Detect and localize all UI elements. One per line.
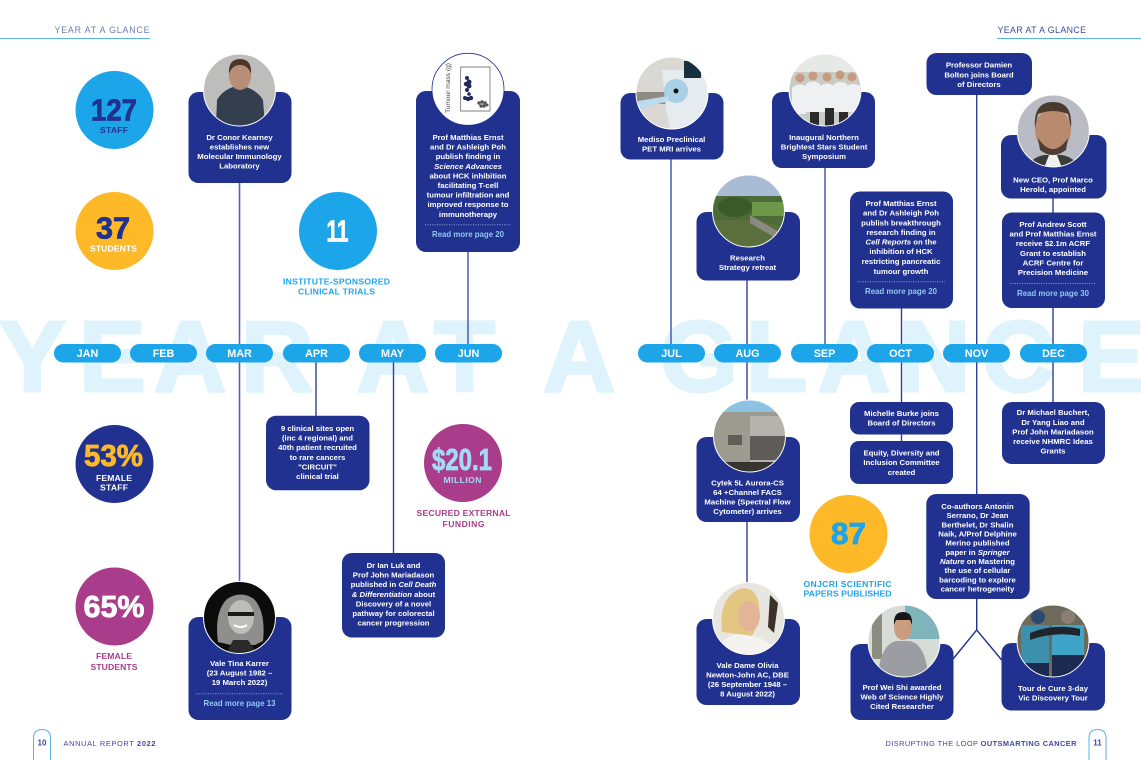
card: Cell Reports finding: research finding in (866, 228, 936, 237)
text: Cited Researcher (870, 702, 934, 711)
photo: Olivia Newton-John (712, 582, 785, 656)
month pills: JUN (458, 348, 479, 360)
card: Olivia Newton-John (696, 582, 800, 705)
card: ACRF Grant: ACRF Centre for (1023, 258, 1083, 267)
card: Ian Luk: published in Cell Death (351, 580, 436, 589)
card: Cell Reports finding: Prof Matthias Ernst (865, 199, 937, 208)
text: Web of Science Highly (861, 692, 944, 702)
card: ACRF Grant: and Prof Matthias Ernst (1010, 230, 1097, 239)
card: clinical sites: (inc 4 regional) and (282, 434, 353, 443)
card: Research Strategy retreat (696, 175, 800, 280)
card: Equity committee: Inclusion Committee (863, 458, 940, 467)
stat: 65% female students: STUDENTS (90, 662, 138, 672)
text: PET MRI arrives (642, 144, 701, 154)
text: Research (730, 254, 765, 262)
stat: 11 clinical trials: 11 (326, 214, 348, 249)
card: clinical sites: "CIRCUIT" (298, 462, 337, 471)
text: tumour infiltration and (427, 191, 510, 200)
text: 19 March 2022) (212, 678, 268, 687)
text: Laboratory (219, 162, 260, 170)
photo: Conor Kearney (203, 54, 276, 126)
footer right (886, 730, 1106, 760)
text: improved response to (428, 200, 509, 209)
footer right: 11 (1093, 738, 1102, 748)
text: publish finding in (436, 152, 501, 161)
stat: 11 clinical trials (283, 192, 390, 296)
card: Damien Bolton: Bolton joins Board (944, 70, 1014, 79)
card: Michelle Burke: Board of Directors (867, 418, 936, 428)
photo: Tina Karrer (203, 581, 276, 654)
card: clinical sites: 9 clinical sites open (281, 424, 354, 433)
text: Herold, appointed (1020, 185, 1086, 194)
read more link: Read more page 30 (1017, 289, 1090, 298)
card: clinical sites: 40th patient recruited (278, 443, 357, 452)
header left: YEAR AT A GLANCE (54, 25, 150, 35)
stat: 87 papers: 87 (831, 516, 866, 551)
card: Cell Reports finding: Cell Reports on the (865, 238, 937, 247)
footer right: DISRUPTING THE LOOP OUTSMARTING CANCER (886, 739, 1077, 748)
text: Cytek 5L Aurora-CS (711, 478, 784, 488)
month pills: DEC (1042, 348, 1065, 360)
card: Ian Luk (342, 553, 445, 638)
card: Springer Nature paper: Berthelet, Dr Shalin (942, 520, 1014, 529)
card: Cytek Aurora (696, 400, 800, 522)
card: Springer Nature paper: Serrano, Dr Jean (946, 511, 1009, 520)
card: Michelle Burke: Michelle Burke joins (864, 409, 939, 418)
card: Damien Bolton: of Directors (957, 80, 1001, 89)
text: about HCK inhibition (429, 171, 507, 180)
stat: 53% female staff: FEMALE (96, 473, 132, 483)
card: Science Advances finding (416, 53, 520, 252)
month pills: MAR (227, 348, 252, 360)
stat: 127 staff (76, 71, 154, 149)
stat: 127 staff: 127 (91, 93, 137, 128)
card: Springer Nature paper: the use of cellular (945, 566, 1010, 575)
card: Ian Luk: cancer progression (358, 619, 430, 628)
card: ACRF Grant: receive $2.1m ACRF (1016, 239, 1090, 248)
text: Mediso Preclinical (638, 135, 705, 144)
stat: $20.1 million: $20.1 (432, 442, 492, 477)
text: Machine (Spectral Flow (704, 498, 792, 507)
card: Cell Reports finding: publish breakthrough (861, 218, 941, 227)
text: (26 September 1948 – (708, 680, 788, 689)
card: Springer Nature paper: barcoding to explore (939, 575, 1017, 584)
card: Springer Nature paper: Naik, A/Prof Delphine (938, 530, 1017, 538)
text: Inaugural Northern (789, 133, 859, 142)
card: Damien Bolton: Professor Damien (946, 61, 1012, 70)
text: (23 August 1982 – (207, 669, 273, 678)
card: Tour de Cure (1002, 605, 1105, 710)
month pills: SEP (814, 348, 835, 360)
footer left: 10 (38, 738, 47, 748)
chart photo: tumour mass: Tumour mass (g) (445, 63, 452, 113)
stat: 11 clinical trials: INSTITUTE-SPONSORED (283, 276, 390, 286)
chart photo: tumour mass (432, 64, 504, 125)
stat: $20.1 million: SECURED EXTERNAL (416, 508, 510, 518)
stat: 65% female students: 65% (84, 589, 144, 624)
card: Ian Luk: Dr Ian Luk and (367, 561, 421, 570)
card: Ian Luk: Prof John Mariadason (353, 571, 434, 580)
text: Strategy retreat (719, 263, 777, 272)
stat: 53% female staff: STAFF (100, 483, 128, 493)
text: immunotherapy (439, 210, 498, 219)
text: and Dr Ashleigh Poh (430, 143, 506, 152)
month pills: OCT (889, 348, 912, 360)
photo: landscape (712, 175, 785, 248)
text: Symposium (802, 152, 846, 161)
text: Tour de Cure 3-day (1018, 684, 1089, 693)
card: ACRF Grant: Precision Medicine (1018, 268, 1089, 277)
photo: Marco Herold (1017, 95, 1090, 168)
card: Damien Bolton (926, 53, 1032, 95)
card: Springer Nature paper (926, 494, 1030, 599)
stat: $20.1 million (416, 424, 510, 529)
text: Science Advances (434, 162, 503, 171)
card: Springer Nature paper: Co-authors Antonin (941, 502, 1014, 511)
text: Molecular Immunology (197, 152, 282, 161)
photo: Cytek machine (713, 400, 786, 472)
stat: 11 clinical trials: CLINICAL TRIALS (298, 286, 375, 296)
stat: $20.1 million: MILLION (444, 475, 482, 485)
card: Wei Shi (850, 605, 954, 720)
card: Cell Reports finding: restricting pancreatic (862, 257, 941, 266)
card: Cell Reports finding: inhibition of HCK (869, 247, 933, 256)
card: new CEO (1001, 95, 1106, 198)
text: Newton-John AC, DBE (706, 670, 789, 680)
text: Brightest Stars Student (781, 142, 868, 152)
card: NHMRC grants: Prof John Mariadason (1012, 428, 1094, 436)
text: Vale Dame Olivia (716, 661, 779, 670)
text: 8 August 2022) (720, 690, 775, 698)
photo: PET MRI machine (636, 57, 708, 129)
month pills (54, 344, 1087, 362)
card: Springer Nature paper: cancer hetrogeneity (941, 584, 1015, 594)
card: ACRF Grant: Grant to establish (1020, 249, 1086, 258)
card: Equity committee: Equity, Diversity and (863, 448, 940, 458)
card: ACRF Grant (1002, 212, 1105, 308)
month pills: JAN (77, 348, 98, 360)
card: Equity committee: created (888, 468, 916, 477)
read more link: Read more page 13 (204, 699, 276, 708)
stat: 53% female staff (76, 425, 154, 503)
month pills: MAY (381, 348, 405, 360)
text: New CEO, Prof Marco (1013, 176, 1093, 184)
card: Ian Luk: Discovery of a novel (356, 599, 431, 608)
month pills: NOV (965, 348, 989, 360)
card: Michelle Burke (850, 402, 953, 434)
text: Dr Conor Kearney (206, 133, 273, 142)
card: Cell Reports finding (850, 192, 953, 308)
card: Ian Luk: & Differentiation about (352, 590, 435, 599)
stat: 87 papers (804, 495, 892, 599)
text: establishes new (210, 142, 270, 152)
read more link: Read more page 20 (865, 287, 938, 296)
card: clinical sites: clinical trial (296, 472, 339, 481)
card: Springer Nature paper: Merino published (945, 539, 1010, 548)
watermark title: YEAR AT A GLANCE (0, 301, 1141, 413)
month pills: JUL (661, 348, 682, 360)
card: Springer Nature paper: Nature on Mastering (940, 557, 1015, 566)
card: Tina Karrer (188, 581, 292, 720)
card: Equity committee (850, 441, 953, 484)
card: Northern Brightest Stars (772, 54, 875, 168)
card: Cell Reports finding: tumour growth (874, 267, 929, 276)
header right: YEAR AT A GLANCE (998, 25, 1086, 35)
card: NHMRC grants: Grants (1041, 446, 1065, 456)
stat: 65% female students: FEMALE (96, 651, 132, 661)
card: Conor Kearney (188, 54, 292, 183)
card: Cell Reports finding: and Dr Ashleigh Poh (863, 209, 939, 218)
stat: 53% female staff: 53% (84, 438, 143, 473)
card: NHMRC grants: receive NHMRC Ideas (1013, 437, 1093, 446)
card: Springer Nature paper: paper in Springer (945, 548, 1010, 557)
card: NHMRC grants: Dr Michael Buchert, (1017, 408, 1089, 417)
read more link: Read more page 20 (432, 230, 505, 239)
card: Mediso (620, 57, 724, 160)
stat: 127 staff: STAFF (100, 125, 128, 135)
card: NHMRC grants: Dr Yang Liao and (1021, 418, 1085, 427)
text: Prof Wei Shi awarded (862, 683, 942, 692)
photo: Wei Shi (868, 605, 940, 677)
timeline connectors (240, 95, 1053, 660)
text: facilitating T-cell (438, 181, 498, 190)
photo: cyclists (1017, 605, 1089, 677)
stat: 87 papers: ONJCRI SCIENTIFIC (804, 579, 892, 589)
month pills: FEB (153, 348, 174, 360)
stat: 37 students: 37 (96, 211, 130, 246)
month pills: APR (305, 348, 328, 360)
text: 64 +Channel FACS (713, 488, 782, 497)
footer left (34, 730, 156, 760)
stat: 65% female students (76, 568, 154, 672)
text: Prof Matthias Ernst (432, 133, 504, 142)
card: Ian Luk: pathway for colorectal (352, 609, 435, 618)
footer left: ANNUAL REPORT 2022 (64, 739, 156, 748)
photo: group of students (789, 54, 861, 126)
card: clinical sites (266, 416, 370, 490)
card: ACRF Grant: Prof Andrew Scott (1019, 220, 1087, 229)
stat: 37 students: STUDENTS (90, 244, 137, 254)
text: Cytometer) arrives (713, 507, 782, 516)
month pills: AUG (736, 348, 760, 360)
stat: 87 papers: PAPERS PUBLISHED (804, 589, 892, 599)
card: clinical sites: to rare cancers (290, 453, 345, 462)
stat: 37 students (76, 192, 154, 270)
stat: $20.1 million: FUNDING (442, 519, 485, 529)
card: NHMRC grants (1002, 402, 1105, 464)
text: Vic Discovery Tour (1018, 694, 1088, 702)
text: Vale Tina Karrer (210, 659, 269, 668)
